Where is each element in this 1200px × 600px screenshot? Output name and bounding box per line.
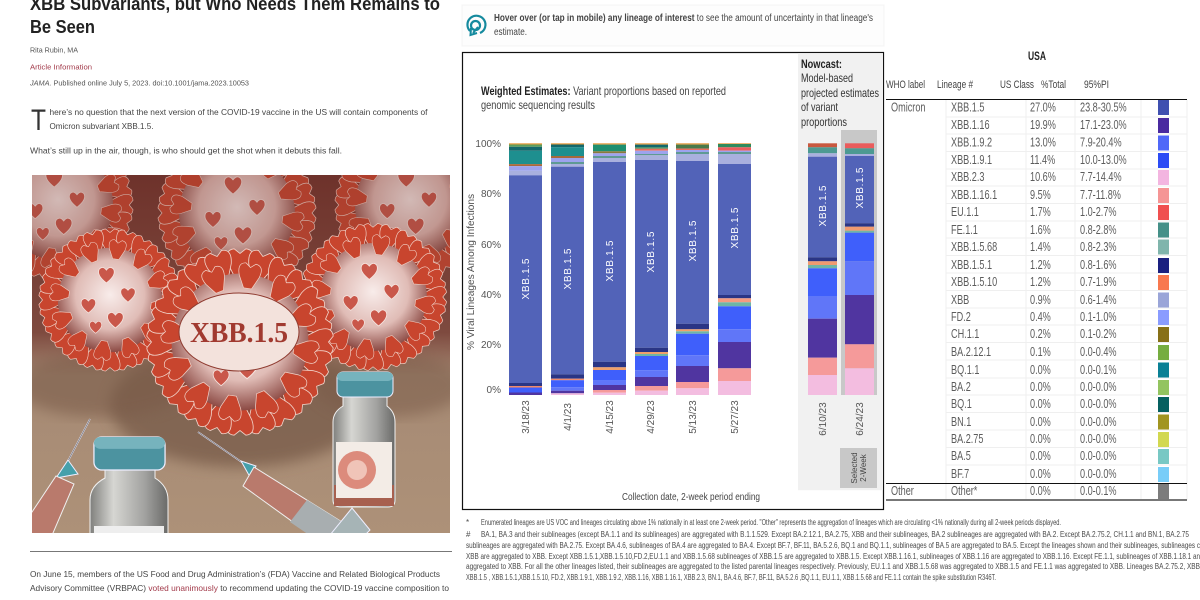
bar labels XBB.1.5: XBB.1.5	[818, 185, 829, 226]
y axis labels: 40%	[481, 290, 501, 301]
nowcast heading	[801, 57, 879, 129]
table: USA lineage proportions	[886, 51, 1187, 500]
footnotes: #	[466, 530, 471, 539]
percent total column: 1.6%	[1030, 224, 1051, 237]
percent total column: 1.7%	[1030, 206, 1051, 219]
y axis labels: 60%	[481, 240, 501, 251]
article title: Be Seen	[30, 16, 95, 37]
x axis date labels: 4/15/23	[605, 400, 616, 434]
stacked bar: 3/18/23	[509, 143, 542, 395]
illustration: XBB.1.5 viruses with vaccine vials and syringes	[32, 175, 450, 533]
percent total column: 0.0%	[1030, 381, 1051, 394]
table grid	[946, 100, 1187, 500]
percent total column: 0.0%	[1030, 416, 1051, 429]
selected 2-week tag	[840, 448, 877, 488]
stacked bar: 4/29/23	[635, 143, 668, 395]
95% prediction interval column: 0.0-0.1%	[1080, 485, 1117, 498]
x axis date labels: 5/13/23	[688, 400, 699, 434]
y axis labels	[466, 139, 501, 396]
instruction note	[462, 5, 884, 46]
x axis date labels: 5/27/23	[730, 400, 741, 434]
95% prediction interval column: 0.1-0.2%	[1080, 328, 1117, 341]
instruction note: Hover over (or tap in mobile) any lineage of interest to see the amount of uncertainty in that lineage's	[494, 13, 873, 24]
lineage column	[951, 101, 997, 498]
x axis date labels: 6/10/23	[818, 402, 829, 436]
footnotes: *	[466, 518, 469, 527]
lineage column: BF.7	[951, 468, 969, 481]
bar labels XBB.1.5: XBB.1.5	[646, 231, 657, 272]
article intro text: Omicron subvariant XBB.1.5.	[50, 121, 154, 131]
stacked bar: 6/24/23	[845, 143, 874, 395]
bar labels XBB.1.5: XBB.1.5	[605, 240, 616, 282]
article body text	[30, 569, 449, 600]
table header: 95%PI	[1084, 79, 1109, 91]
percent total column: 0.4%	[1030, 311, 1051, 324]
95% prediction interval column: 0.0-0.0%	[1080, 450, 1117, 463]
table header: US Class	[1000, 79, 1034, 91]
percent total column: 11.4%	[1030, 154, 1055, 167]
nowcast heading: Nowcast:	[801, 57, 842, 71]
selected 2-week tag: Selected	[850, 452, 859, 484]
WHO label column: Other	[891, 485, 914, 498]
95% prediction interval column: 7.9-20.4%	[1080, 136, 1122, 150]
lineage column: BA.2.12.1	[951, 346, 991, 359]
table header: WHO label	[886, 79, 925, 91]
95% prediction interval column: 0.8-2.3%	[1080, 241, 1117, 254]
percent total column: 1.2%	[1030, 276, 1051, 289]
95% prediction interval column: 0.0-0.1%	[1080, 364, 1117, 377]
percent total column: 1.4%	[1030, 241, 1051, 254]
bar labels XBB.1.5: XBB.1.5	[855, 167, 866, 208]
lineage column: FD.2	[951, 311, 971, 324]
stacked bar: 5/13/23	[676, 143, 709, 395]
article intro text: T	[31, 104, 46, 137]
icon: target with arrow	[467, 16, 485, 35]
bar labels XBB.1.5: XBB.1.5	[563, 248, 574, 290]
lineage column: XBB.1.16.1	[951, 189, 997, 202]
byline and citation: Article Information	[30, 62, 92, 72]
nowcast heading: of variant	[801, 100, 838, 114]
WHO label column: Omicron	[891, 101, 925, 115]
x axis title: Collection date, 2-week period ending	[622, 492, 760, 503]
lineage column: XBB.1.9.1	[951, 154, 992, 167]
stacked bar: 5/27/23	[718, 143, 751, 395]
weighted estimates heading	[481, 84, 726, 112]
footnotes	[466, 518, 1200, 582]
lineage column: BA.2.75	[951, 433, 983, 446]
95% prediction interval column: 0.0-0.0%	[1080, 416, 1117, 429]
95% prediction interval column: 0.8-1.6%	[1080, 259, 1117, 272]
nowcast heading: projected estimates	[801, 86, 879, 100]
article body text: On June 15, members of the US Food and Drug Administration’s (FDA) Vaccine and Related Biological Products	[30, 569, 440, 579]
WHO label column	[891, 101, 925, 498]
lineage column: XBB.1.16	[951, 119, 990, 132]
95% prediction interval column: 0.1-1.0%	[1080, 311, 1117, 324]
table header: %Total	[1041, 79, 1066, 91]
lineage column: XBB.2.3	[951, 171, 984, 184]
percent total column: 0.0%	[1030, 364, 1051, 377]
article panel	[30, 0, 452, 592]
95% prediction interval column: 17.1-23.0%	[1080, 119, 1127, 132]
weighted estimates heading: genomic sequencing results	[481, 98, 595, 112]
95% prediction interval column: 1.0-2.7%	[1080, 206, 1117, 219]
percent total column: 0.0%	[1030, 433, 1051, 446]
y axis labels: 100%	[475, 139, 501, 150]
lineage column: CH.1.1	[951, 328, 979, 341]
table title: USA	[1028, 51, 1046, 63]
lineage column: XBB.1.5	[951, 101, 984, 115]
selected 2-week tag: 2-Week	[859, 453, 868, 482]
95% prediction interval column: 0.8-2.8%	[1080, 224, 1117, 237]
stacked bar: 4/15/23	[593, 143, 626, 395]
virus label: XBB.1.5	[190, 318, 288, 349]
x axis date labels: 4/29/23	[646, 400, 657, 434]
lineage column: XBB.1.5.10	[951, 276, 997, 289]
article body text: Advisory Committee (VRBPAC) voted unanimously to recommend updating the COVID-19 vaccine composition to	[30, 583, 449, 593]
table header	[886, 79, 1109, 91]
table header: Lineage #	[937, 79, 974, 91]
weighted estimates heading: Weighted Estimates: Variant proportions based on reported	[481, 84, 726, 98]
article intro text: What’s still up in the air, though, is who should get the shot when it debuts this fall.	[30, 146, 342, 156]
byline and citation	[29, 46, 249, 88]
95% prediction interval column: 0.0-0.0%	[1080, 433, 1117, 446]
percent total column: 0.0%	[1030, 450, 1051, 463]
x axis date labels: 3/18/23	[521, 400, 532, 434]
percent total column: 27.0%	[1030, 101, 1056, 115]
stacked bar: 6/10/23	[808, 143, 837, 395]
95% prediction interval column: 0.7-1.9%	[1080, 276, 1117, 289]
percent total column: 0.0%	[1030, 468, 1051, 481]
percent total column: 19.9%	[1030, 119, 1056, 132]
nowcast heading: proportions	[801, 115, 847, 129]
95% prediction interval column: 0.0-0.4%	[1080, 346, 1117, 359]
colour swatches	[1158, 100, 1169, 499]
95% prediction interval column: 0.0-0.0%	[1080, 398, 1117, 411]
bar labels XBB.1.5: XBB.1.5	[521, 258, 532, 300]
percent total column	[1030, 101, 1056, 498]
95% prediction interval column: 0.6-1.4%	[1080, 294, 1117, 307]
instruction note: estimate.	[494, 27, 527, 38]
article intro text: here’s no question that the next version of the COVID-19 vaccine in the US will contain components of	[50, 107, 428, 117]
95% prediction interval column: 7.7-11.8%	[1080, 189, 1121, 202]
y axis labels: 80%	[481, 189, 501, 200]
y axis labels: 20%	[481, 340, 501, 351]
y axis labels: % Viral Lineages Among Infections	[466, 194, 477, 350]
percent total column: 0.9%	[1030, 294, 1051, 307]
x axis date labels: 6/24/23	[855, 402, 866, 436]
bar labels XBB.1.5: XBB.1.5	[688, 220, 699, 262]
lineage column: BN.1	[951, 416, 971, 429]
y axis labels: 0%	[487, 385, 501, 396]
lineage column: Other*	[951, 485, 978, 498]
x axis date labels: 4/1/23	[563, 403, 574, 431]
lineage column: BA.5	[951, 450, 971, 463]
lineage column: XBB.1.5.68	[951, 241, 997, 254]
95% prediction interval column: 10.0-13.0%	[1080, 154, 1127, 167]
95% prediction interval column: 0.0-0.0%	[1080, 381, 1117, 394]
percent total column: 0.2%	[1030, 328, 1051, 341]
percent total column: 10.6%	[1030, 171, 1056, 184]
byline and citation: JAMA. Published online July 5, 2023. doi:10.1001/jama.2023.10053	[29, 78, 249, 88]
95% prediction interval column: 7.7-14.4%	[1080, 171, 1122, 184]
x axis date labels	[521, 400, 866, 436]
panel: nowcast background	[798, 53, 883, 490]
lineage column: EU.1.1	[951, 206, 979, 219]
divider rule	[30, 550, 452, 552]
bar labels XBB.1.5: XBB.1.5	[730, 207, 741, 248]
selected period highlight	[841, 130, 877, 395]
percent total column: 0.1%	[1030, 346, 1051, 359]
percent total column: 13.0%	[1030, 136, 1056, 150]
lineage column: BQ.1.1	[951, 364, 979, 377]
bar labels XBB.1.5	[521, 167, 866, 300]
article intro text	[30, 104, 428, 156]
article title	[30, 0, 440, 37]
percent total column: 9.5%	[1030, 189, 1051, 202]
lineage column: XBB.1.9.2	[951, 136, 992, 150]
percent total column: 0.0%	[1030, 398, 1051, 411]
lineage column: BA.2	[951, 381, 971, 394]
chart panel frame	[462, 52, 884, 510]
95% prediction interval column	[1080, 101, 1127, 498]
footnotes: XBB.1.5 , XBB.1.5.1,XBB.1.5.10, FD.2, XBB.1.9.1, XBB.1.9.2, XBB.1.16, XBB.1.16.1, XBB.2.3, BN.1, BA.4.6, BF.7, BF.11, BA.5.2.6 ,BQ.1.1, EU.1.1, XBB.1.5.68 and FE.1.1 contain the spike substitution R346T.	[466, 573, 996, 582]
lineage column: FE.1.1	[951, 224, 978, 237]
lineage column: BQ.1	[951, 398, 972, 411]
95% prediction interval column: 23.8-30.5%	[1080, 101, 1127, 115]
95% prediction interval column: 0.0-0.0%	[1080, 468, 1117, 481]
lineage column: XBB	[951, 294, 969, 307]
percent total column: 0.0%	[1030, 485, 1051, 498]
nowcast heading: Model-based	[801, 71, 853, 85]
lineage column: XBB.1.5.1	[951, 259, 992, 272]
byline and citation: Rita Rubin, MA	[30, 46, 78, 54]
stacked bar: 4/1/23	[551, 143, 584, 395]
percent total column: 1.2%	[1030, 259, 1051, 272]
